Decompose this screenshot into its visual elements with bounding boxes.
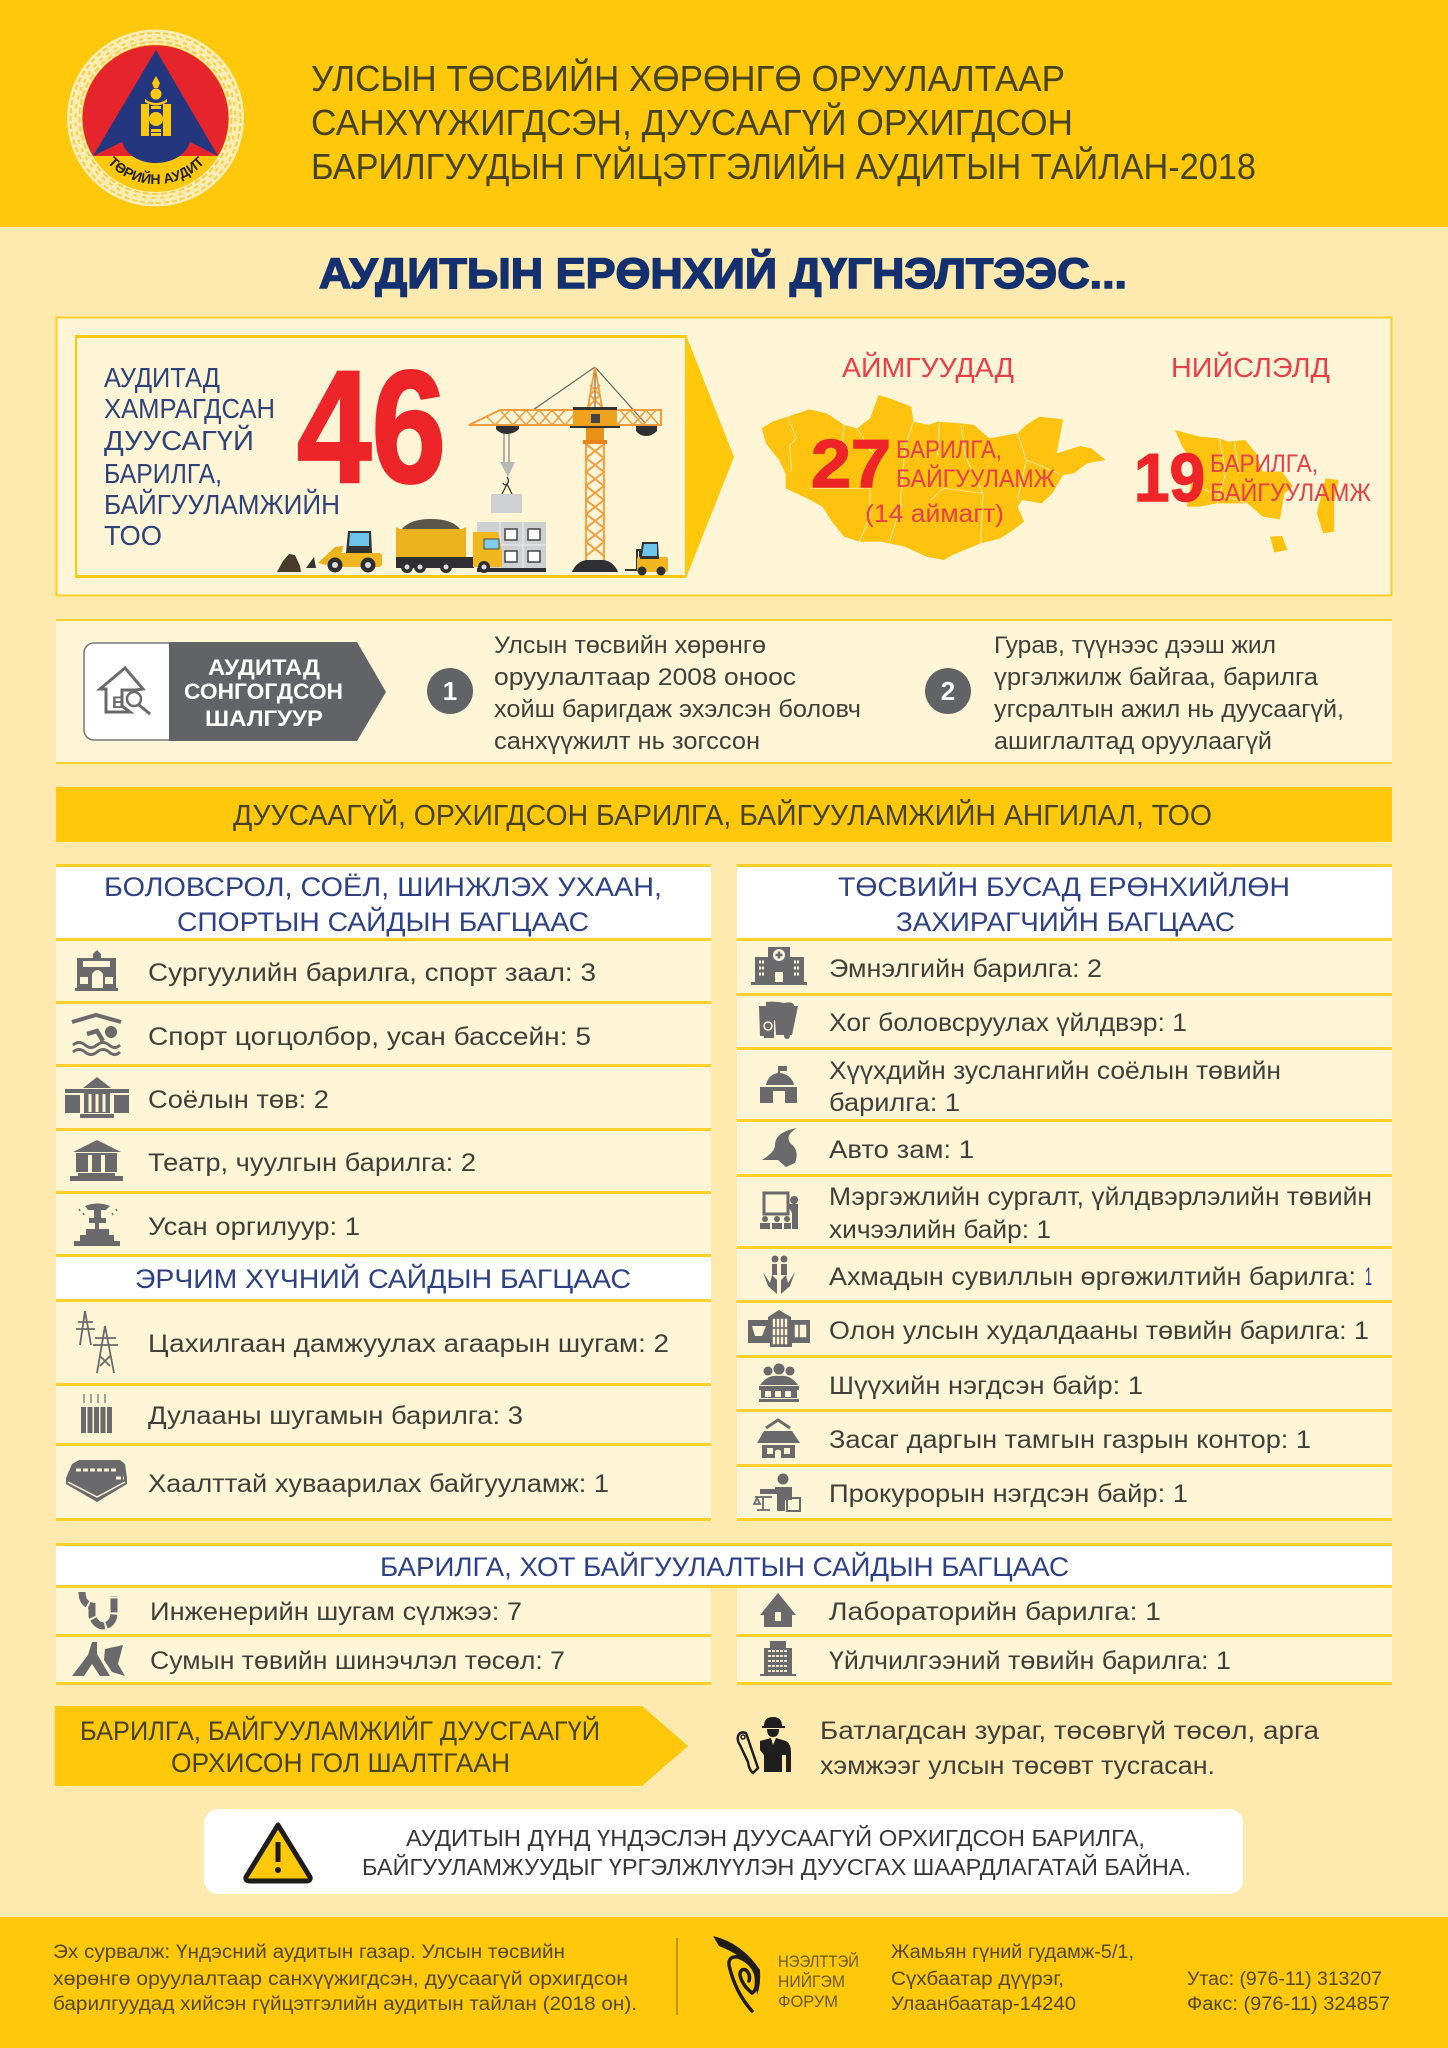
- text: 27 buildings in provinces: (14 аймагт): [865, 500, 1004, 528]
- heading: construction ministry: БАРИЛГА, ХОТ БАЙГУУЛАЛТЫН САЙДЫН БАГЦААС: [380, 1551, 1069, 1582]
- text: address: Улаанбаатар-14240: [891, 1994, 1076, 2015]
- text: 19 buildings in capital: [1134, 440, 1371, 516]
- row: prosecutor: [754, 1474, 1188, 1511]
- row: governor's office: [757, 1420, 1311, 1458]
- criterion 1: санхүүжилт нь зогссон: [494, 728, 760, 755]
- criterion 1: [427, 632, 861, 755]
- logo: open society forum: НЭЭЛТТЭЙ: [778, 1952, 859, 1971]
- text: audited buildings: БАРИЛГА,: [104, 458, 222, 489]
- row: closed distribution facility: [66, 1460, 609, 1502]
- row: vocational training: хичээлийн байр: 1: [829, 1216, 1051, 1244]
- criterion 1: Улсын төсвийн хөрөнгө: [494, 632, 766, 659]
- criterion 2: угсралтын ажил нь дуусаагүй,: [994, 696, 1344, 723]
- text: address: Сүхбаатар дүүрэг,: [891, 1969, 1064, 1990]
- text: audited buildings: БАЙГУУЛАМЖИЙН: [104, 489, 340, 520]
- row: waste facility: [759, 1002, 1187, 1039]
- row: engineering networks: [82, 1592, 522, 1626]
- row: power lines: [76, 1311, 669, 1373]
- text: audited buildings: [104, 362, 340, 551]
- row: theatre: Театр, чуулгын барилга: 2: [148, 1149, 476, 1177]
- row: fountain: Усан оргилуур: 1: [148, 1213, 360, 1241]
- arrow: main reason: БАРИЛГА, БАЙГУУЛАМЖИЙГ ДУУСГААГҮЙ: [80, 1715, 600, 1746]
- heading: education ministry: БОЛОВСРОЛ, СОЁЛ, ШИНЖЛЭХ УХААН,: [104, 872, 662, 902]
- badge: selected criteria: ШАЛГУУР: [205, 706, 323, 731]
- text: main reason: [820, 1717, 1319, 1780]
- logo: open society forum: ФОРУМ: [778, 1992, 838, 2011]
- row: trade centre: [748, 1310, 1369, 1347]
- badge: selected criteria: СОНГОГДСОН: [184, 679, 343, 704]
- row: laboratory: Лабораторийн барилга: 1: [829, 1598, 1161, 1626]
- heading: other budget governors: ТӨСВИЙН БУСАД ЕРӨНХИЙЛӨН: [838, 871, 1290, 902]
- row: engineering networks: Инженерийн шугам сүлжээ: 7: [150, 1598, 522, 1626]
- heading: other budget governors: ЗАХИРАГЧИЙН БАГЦААС: [896, 906, 1235, 937]
- panel: construction ministry: [56, 1543, 1392, 1685]
- heading: other budget governors: [838, 871, 1290, 937]
- row: sports complex: [72, 1015, 591, 1054]
- row: court: Шүүхийн нэгдсэн байр: 1: [829, 1372, 1143, 1400]
- heading: education ministry: [104, 872, 662, 937]
- panel: total count and locations: [56, 318, 1392, 596]
- text: phone and fax: Утас: (976-11) 313207: [1187, 1969, 1382, 1990]
- header band: [0, 0, 1448, 227]
- title: [311, 57, 1256, 187]
- icon: engineer with plans: [738, 1717, 791, 1773]
- panel: left column: [56, 864, 711, 1521]
- text: source: [53, 1942, 637, 2015]
- row: governor's office: Засаг даргын тамгын газрын контор: 1: [829, 1426, 1311, 1454]
- row: school: Сургуулийн барилга, спорт заал: 3: [148, 959, 596, 987]
- criterion 1: 1: [443, 676, 457, 706]
- row: court: [759, 1364, 1143, 1402]
- map: Mongolia provinces: [762, 395, 1106, 560]
- text: 19 buildings in capital: БАРИЛГА,: [1210, 450, 1318, 478]
- row: cultural centre: Соёлын төв: 2: [148, 1086, 329, 1114]
- criterion 2: ашиглалтад оруулаагүй: [994, 728, 1272, 755]
- badge: selected criteria: АУДИТАД: [208, 655, 320, 680]
- heading: education ministry: СПОРТЫН САЙДЫН БАГЦААС: [177, 906, 589, 937]
- text: source: Эх сурвалж: Үндэсний аудитын газар. Улсын төсвийн: [53, 1942, 565, 1963]
- row: heating line: Дулааны шугамын барилга: 3: [148, 1402, 523, 1430]
- text: address: [891, 1942, 1134, 2015]
- row: children's camp: [760, 1057, 1281, 1117]
- criterion 2: [925, 632, 1344, 755]
- criterion 2: 2: [941, 676, 955, 706]
- main heading: АУДИТЫН ЕРӨНХИЙ ДҮГНЭЛТЭЭС...: [319, 249, 1127, 298]
- arrow: main reason: ОРХИСОН ГОЛ ШАЛТГААН: [171, 1748, 510, 1778]
- row: prosecutor: Прокурорын нэгдсэн байр: 1: [829, 1480, 1188, 1508]
- logo: open society forum: [713, 1936, 859, 2011]
- heading: energy ministry: ЭРЧИМ ХҮЧНИЙ САЙДЫН БАГЦААС: [135, 1263, 631, 1294]
- row: waste facility: Хог боловсруулах үйлдвэр: 1: [829, 1009, 1187, 1037]
- criterion 1: хойш баригдаж эхэлсэн боловч: [494, 696, 861, 723]
- footer: [0, 1917, 1448, 2048]
- text: audited buildings: АУДИТАД: [104, 362, 220, 393]
- row: soum centre renovation: Сумын төвийн шинэчлэл төсөл: 7: [150, 1647, 565, 1675]
- row: vocational training: [760, 1183, 1372, 1244]
- row: service centre: Үйлчилгээний төвийн барилга: 1: [829, 1647, 1231, 1675]
- text: audited buildings: ТОО: [104, 520, 162, 551]
- heading: capital: НИЙСЛЭЛД: [1171, 352, 1330, 383]
- badge: selected criteria: [84, 642, 386, 741]
- number 46: 46: [297, 337, 446, 516]
- row: closed distribution facility: Хаалттай хуваарилах байгууламж: 1: [148, 1470, 609, 1498]
- text: 19 buildings in capital: 19: [1134, 440, 1205, 516]
- row: children's camp: Хүүхдийн зуслангийн соёлын төвийн: [829, 1057, 1281, 1085]
- text: phone and fax: [1187, 1969, 1390, 2015]
- row: school: [75, 950, 596, 991]
- arrow panel: 46 buildings: [75, 335, 734, 578]
- row: laboratory: [760, 1593, 1161, 1627]
- text: address: Жамьян гүний гудамж-5/1,: [891, 1942, 1134, 1963]
- text: main reason: хэмжээг улсын төсөвт тусгасан.: [820, 1752, 1215, 1780]
- row: trade centre: Олон улсын худалдааны төвийн барилга: 1: [829, 1317, 1369, 1345]
- row: children's camp: барилга: 1: [829, 1089, 960, 1117]
- row: vocational training: Мэргэжлийн сургалт, үйлдвэрлэлийн төвийн: [829, 1183, 1372, 1211]
- arrow: main reason: [55, 1706, 688, 1786]
- icon: prefab building: [477, 522, 546, 572]
- text: audited buildings: ДУУСАГҮЙ: [104, 425, 254, 456]
- map: capital districts: [1175, 430, 1339, 552]
- title: САНХҮҮЖИГДСЭН, ДУУСААГҮЙ ОРХИГДСОН: [311, 101, 1073, 143]
- panel: right column: [737, 864, 1392, 1521]
- row: road: Авто зам: 1: [829, 1136, 974, 1164]
- text: 27 buildings in provinces: 27: [811, 426, 891, 502]
- callout: recommendation: АУДИТЫН ДҮНД ҮНДЭСЛЭН ДУУСААГҮЙ ОРХИГДСОН БАРИЛГА,: [406, 1824, 1145, 1851]
- callout: recommendation: [204, 1809, 1243, 1894]
- row: elderly care: [763, 1256, 1372, 1294]
- banner: classification heading: [56, 787, 1392, 842]
- icon: dump truck: [396, 519, 502, 573]
- text: audited buildings: ХАМРАГДСАН: [104, 393, 275, 424]
- logo: state audit emblem: [67, 30, 244, 206]
- row: theatre: [70, 1140, 476, 1181]
- panel: selection criteria: [56, 619, 1392, 764]
- row: cultural centre: [65, 1077, 329, 1118]
- row: road: [762, 1128, 974, 1167]
- banner: classification heading: ДУУСААГҮЙ, ОРХИГДСОН БАРИЛГА, БАЙГУУЛАМЖИЙН АНГИЛАЛ, ТОО: [233, 798, 1212, 832]
- text: source: барилгуудад хийсэн гүйцэтгэлийн аудитын тайлан (2018 он).: [53, 1994, 637, 2015]
- text: phone and fax: Факс: (976-11) 324857: [1187, 1994, 1390, 2015]
- row: hospital: [751, 947, 1102, 985]
- row: soum centre renovation: [72, 1642, 565, 1676]
- text: source: хөрөнгө оруулалтаар санхүүжигдсэн, дуусаагүй орхигдсон: [53, 1969, 628, 1990]
- icon: forklift: [625, 542, 668, 576]
- title: УЛСЫН ТӨСВИЙН ХӨРӨНГӨ ОРУУЛАЛТААР: [311, 57, 1065, 99]
- row: power lines: Цахилгаан дамжуулах агаарын шугам: 2: [148, 1330, 669, 1358]
- icon: warning triangle: [246, 1825, 310, 1881]
- row: fountain: [74, 1204, 360, 1246]
- text: 27 buildings in provinces: БАРИЛГА,: [896, 436, 1002, 464]
- row: elderly care: 1: [1365, 1263, 1372, 1291]
- row: sports complex: Спорт цогцолбор, усан бассейн: 5: [148, 1023, 591, 1051]
- icon: tower crane: [469, 367, 661, 572]
- badge: selected criteria: E: [112, 693, 123, 712]
- row: hospital: Эмнэлгийн барилга: 2: [829, 955, 1102, 983]
- text: 27 buildings in provinces: БАЙГУУЛАМЖ: [896, 463, 1055, 493]
- callout: recommendation: БАЙГУУЛАМЖУУДЫГ ҮРГЭЛЖЛҮҮЛЭН ДУУСГАХ ШААРДЛАГАТАЙ БАЙНА.: [362, 1853, 1191, 1880]
- heading: provinces: АЙМГУУДАД: [842, 352, 1014, 383]
- row: heating line: [81, 1394, 523, 1433]
- row: service centre: [760, 1641, 1231, 1676]
- icon: wheel loader and dirt pile: [277, 531, 382, 572]
- criterion 2: Гурав, түүнээс дээш жил: [994, 632, 1276, 659]
- title: БАРИЛГУУДЫН ГҮЙЦЭТГЭЛИЙН АУДИТЫН ТАЙЛАН-2018: [311, 145, 1256, 187]
- criterion 2: үргэлжилж байгаа, барилга: [994, 664, 1319, 691]
- logo: state audit emblem: ТӨРИЙН АУДИТ: [110, 156, 202, 184]
- row: elderly care: Ахмадын сувиллын өргөжилтийн барилга:: [829, 1263, 1356, 1291]
- text: main reason: Батлагдсан зураг, төсөвгүй төсөл, арга: [820, 1717, 1319, 1745]
- text: 27 buildings in provinces: [811, 426, 1055, 528]
- logo: open society forum: НИЙГЭМ: [778, 1972, 845, 1991]
- criterion 1: оруулалтаар 2008 оноос: [494, 664, 796, 691]
- text: 19 buildings in capital: БАЙГУУЛАМЖ: [1210, 477, 1371, 507]
